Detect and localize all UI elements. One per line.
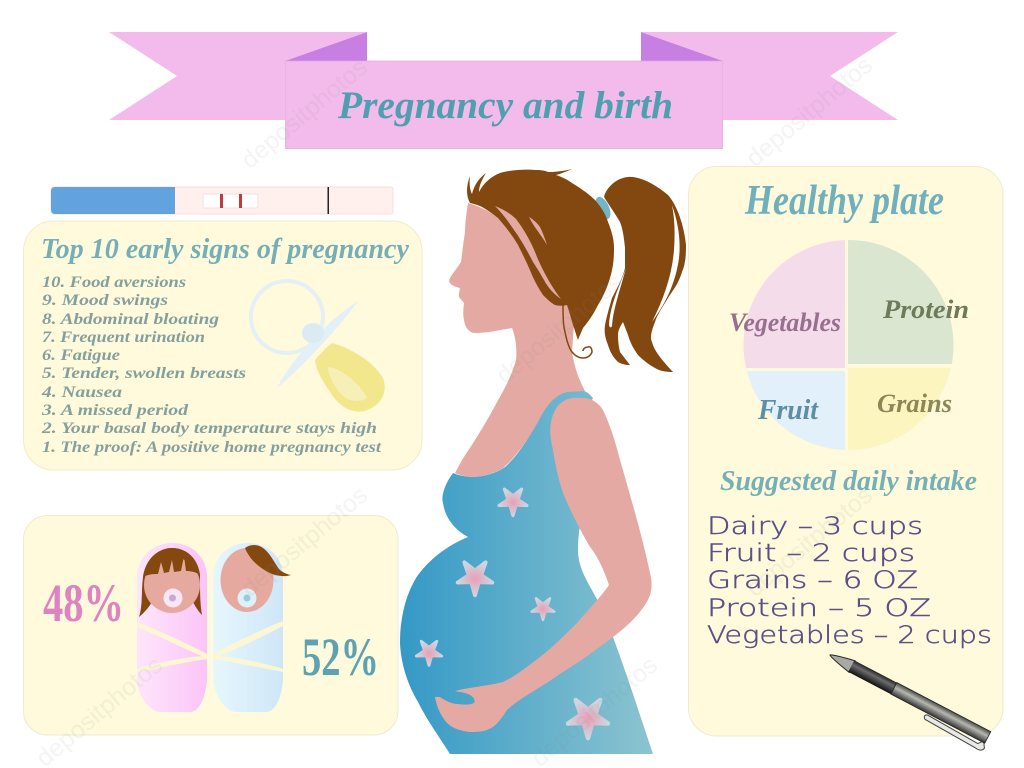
list: signs: 9. Mood swings	[42, 292, 168, 309]
list: signs: 6. Fatigue	[42, 347, 120, 364]
list: daily intake: Fruit – 2 cups	[707, 539, 915, 567]
illustration: pregnant woman	[400, 169, 686, 754]
watermark: depositphotos	[236, 53, 373, 175]
heading: suggested daily intake: Suggested daily intake	[720, 466, 977, 497]
dress	[400, 391, 653, 754]
hair strands	[495, 206, 561, 299]
list: signs: 8. Abdominal bloating	[42, 311, 219, 328]
watermark: depositphotos	[491, 268, 628, 390]
flowers	[416, 489, 608, 738]
arm	[435, 398, 652, 732]
list: daily intake: Vegetables – 2 cups	[707, 621, 992, 649]
body skin	[449, 203, 585, 477]
banner right fold	[641, 32, 723, 61]
banner centre	[286, 61, 722, 148]
list: signs: 10. Food aversions	[42, 274, 186, 291]
label: 48 percent: 48%	[43, 573, 124, 633]
plate vegetables	[740, 236, 845, 368]
plate grains	[848, 368, 951, 450]
plate fruit	[747, 371, 845, 450]
banner right tail	[641, 32, 898, 120]
list: signs: 5. Tender, swollen breasts	[42, 365, 246, 382]
list: signs: 4. Nausea	[41, 384, 122, 401]
icon: baby boy	[213, 543, 291, 712]
watermark: depositphotos	[741, 51, 878, 173]
list: signs: 3. A missed period	[41, 402, 189, 419]
chart: plate	[740, 236, 958, 455]
list: signs: 2. Your basal body temperature stays high	[41, 420, 377, 437]
panel: early signs of pregnancy	[24, 221, 422, 470]
list: daily intake	[707, 512, 992, 649]
list: signs: 7. Frequent urination	[42, 329, 205, 346]
heading: top 10 signs: Top 10 early signs of pregnancy	[41, 233, 409, 265]
list: daily intake: Dairy – 3 cups	[707, 512, 923, 540]
list: signs: 1. The proof: A positive home pregnancy test	[42, 439, 382, 456]
label: grains: Grains	[877, 389, 952, 418]
banner left tail	[109, 32, 367, 120]
label: 52 percent: 52%	[302, 627, 379, 687]
pregnancy test strip	[51, 187, 393, 214]
watermark: depositphotos	[236, 481, 373, 603]
heading: healthy plate: Healthy plate	[744, 178, 944, 224]
label: protein: Protein	[882, 295, 969, 324]
icon: baby girl	[137, 543, 207, 712]
hair curl	[563, 300, 592, 358]
icon: pacifier	[251, 281, 385, 412]
panel: girls and boys	[24, 516, 398, 735]
title: Pregnancy and birth	[337, 84, 673, 127]
label: vegetables: Vegetables	[729, 308, 841, 337]
hair band	[592, 195, 614, 221]
banner	[109, 32, 898, 148]
banner left fold	[285, 32, 367, 61]
list: daily intake: Protein – 5 OZ	[707, 594, 931, 622]
ponytail highlights	[609, 205, 680, 327]
panel: healthy plate	[688, 166, 1003, 752]
ponytail	[604, 177, 686, 372]
watermark: depositphotos	[741, 481, 878, 603]
list: signs	[41, 274, 382, 456]
watermark	[31, 51, 878, 768]
list: daily intake: Grains – 6 OZ	[707, 566, 918, 594]
icon: pen	[823, 649, 993, 752]
label: fruit: Fruit	[757, 395, 819, 426]
plate protein	[848, 236, 958, 364]
hair	[467, 169, 614, 340]
